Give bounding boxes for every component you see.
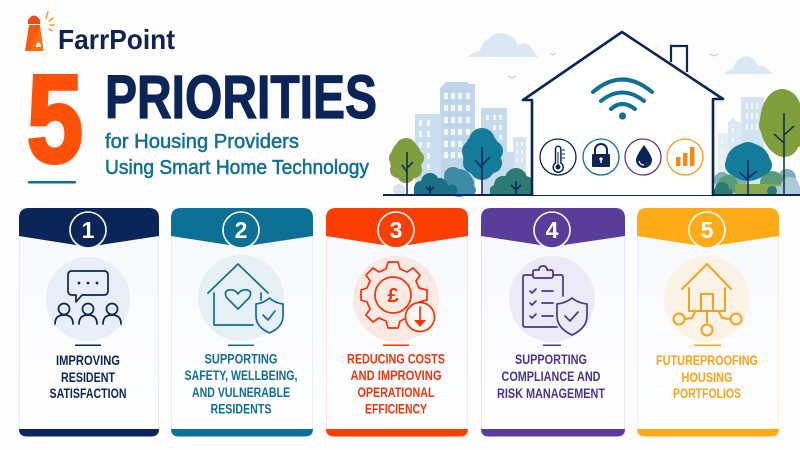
panel 1: improving resident satisfaction [19, 208, 159, 436]
divider and label: FUTUREPROOFING [656, 353, 758, 368]
header band [171, 208, 313, 245]
panel 5: futureproofing [637, 208, 779, 436]
divider and label [347, 344, 445, 416]
panel 3: reducing costs [326, 208, 468, 436]
icon: padlock [583, 139, 619, 175]
divider and label: AND VULNERABLE [192, 385, 290, 400]
divider and label: AND IMPROVING [350, 368, 442, 383]
divider and label: OPERATIONAL [358, 385, 434, 400]
header band [481, 208, 625, 245]
divider and label: COMPLIANCE AND [502, 369, 601, 384]
number badge: 4 [546, 217, 559, 243]
number badge [70, 212, 106, 248]
subtitle: Using Smart Home Technology [105, 157, 369, 179]
header band [637, 208, 779, 245]
number badge: 2 [235, 217, 247, 243]
title: PRIORITIES: PRIORITIES [105, 63, 377, 131]
divider and label [656, 344, 758, 401]
number badge [223, 212, 259, 248]
ground line [383, 194, 800, 196]
accent underline [28, 181, 76, 184]
logo: FarrPoint [25, 12, 175, 55]
icon: signal bars [667, 139, 703, 175]
divider and label: RESIDENT [61, 370, 116, 385]
subtitle [105, 131, 369, 179]
icon: residents speech bubble [46, 257, 130, 341]
divider and label: RESIDENTS [210, 402, 272, 416]
divider and label: SUPPORTING [515, 352, 587, 367]
trees and bushes left [389, 128, 534, 197]
divider and label: EFFICIENCY [365, 402, 427, 416]
divider and label [497, 344, 606, 401]
divider and label: PORTFOLIOS [673, 386, 741, 401]
city buildings right [718, 97, 764, 195]
header band [326, 208, 468, 245]
divider and label: REDUCING COSTS [347, 352, 445, 366]
number badge [534, 212, 570, 248]
divider and label: SUPPORTING [204, 352, 278, 366]
divider and label: SAFETY, WELLBEING, [184, 368, 298, 383]
number badge: 3 [390, 217, 402, 243]
footer band [326, 429, 468, 436]
icon: clipboard and shield [509, 256, 595, 342]
divider and label: HOUSING [682, 370, 732, 385]
icon: connected house [664, 256, 750, 342]
icon: wifi [593, 80, 652, 120]
illustration: smart home and city [383, 32, 800, 197]
icon: gear with pound and down arrow: £ [387, 285, 399, 307]
number badge: 1 [82, 217, 95, 243]
city buildings left [415, 82, 526, 195]
footer band [19, 429, 159, 436]
trees and bushes right [714, 89, 800, 196]
wordmark: FarrPoint [58, 24, 175, 55]
number badge [378, 212, 414, 248]
big number 5: 5 [27, 51, 83, 189]
icon: house with heart and shield [198, 255, 284, 341]
number badge [689, 212, 725, 248]
icon: thermometer [540, 139, 576, 175]
footer band [481, 429, 625, 436]
birds [508, 53, 718, 78]
divider and label [184, 344, 298, 416]
divider and label: RISK MANAGEMENT [497, 386, 606, 401]
subtitle: for Housing Providers [105, 131, 299, 153]
footer band [171, 429, 313, 436]
house [523, 32, 723, 195]
number badge: 5 [701, 217, 714, 243]
divider and label [50, 344, 126, 401]
clouds [468, 33, 773, 74]
panel 2: safety and wellbeing [171, 208, 313, 436]
icon: lighthouse [25, 12, 54, 51]
footer band [637, 429, 779, 436]
divider and label: IMPROVING [56, 353, 120, 368]
icon: gear with pound and down arrow [353, 256, 439, 342]
header band [19, 208, 159, 245]
icon: water drop [625, 139, 661, 175]
panel 4: compliance and risk [481, 208, 625, 436]
divider and label: SATISFACTION [50, 386, 126, 401]
